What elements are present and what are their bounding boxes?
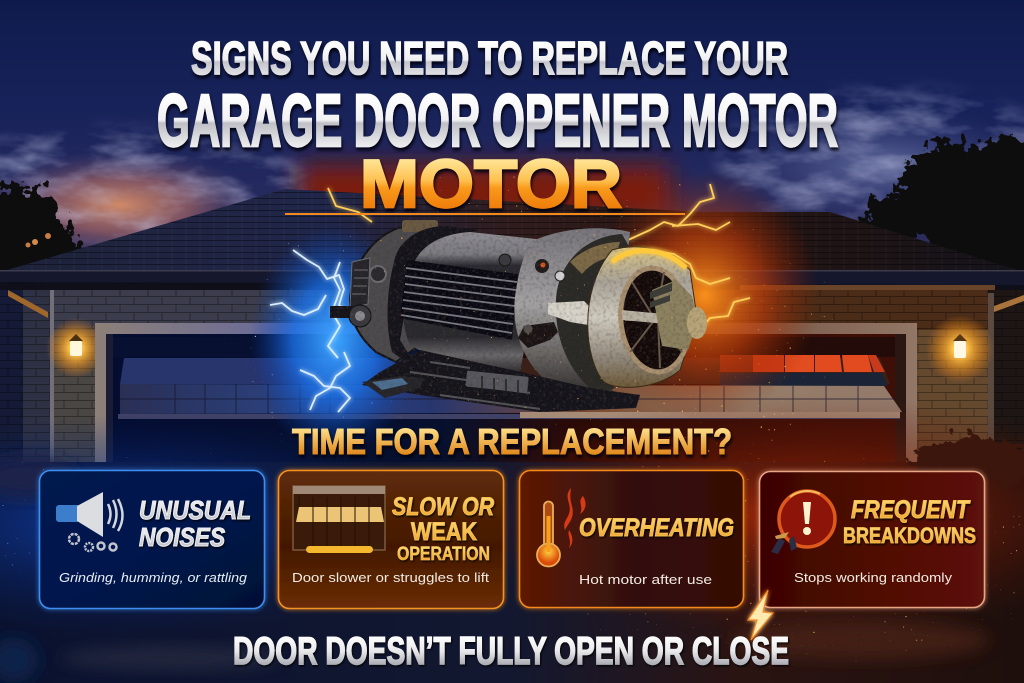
house wall with brick	[0, 290, 1024, 475]
orange lightning	[328, 184, 750, 330]
shaft and hub	[622, 310, 666, 324]
door upper panels	[120, 355, 890, 386]
orange energy glow	[590, 170, 820, 420]
card heading	[843, 496, 976, 548]
garage door	[95, 323, 917, 475]
icon: garage door	[293, 486, 385, 553]
card heading: NOISES	[139, 522, 226, 552]
card heading	[139, 495, 251, 552]
icon: warning circle with broken wires	[771, 491, 835, 554]
inner rotor opening	[616, 265, 694, 375]
card heading: OVERHEATING	[579, 514, 734, 542]
icon: lightning bolt	[748, 590, 773, 640]
icon: thermometer with heat	[537, 488, 586, 566]
question heading: TIME FOR A REPLACEMENT?	[292, 421, 732, 462]
card: frequent breakdowns	[760, 472, 984, 608]
door lower panels	[118, 384, 902, 419]
card heading: BREAKDOWNS	[843, 523, 976, 548]
collar	[514, 228, 630, 395]
card heading	[392, 493, 494, 565]
title	[157, 32, 838, 222]
card: unusual noises	[40, 470, 264, 608]
base mount	[362, 350, 640, 412]
hot edge on bell	[612, 251, 686, 268]
title line 3: MOTOR	[360, 146, 622, 222]
card heading: WEAK	[411, 518, 477, 546]
card description: Hot motor after use	[579, 572, 712, 587]
ground and shrubs	[0, 395, 1024, 683]
motor body with metal grit	[330, 220, 707, 412]
blue lightning	[270, 250, 350, 412]
trees behind the house	[0, 138, 1024, 292]
card heading: OPERATION	[397, 544, 490, 565]
bottom headline: DOOR DOESN’T FULLY OPEN OR CLOSE	[233, 630, 789, 673]
icon: speaker with gears	[56, 492, 122, 551]
dark band	[388, 226, 478, 372]
end cap	[350, 226, 440, 362]
card: overheating	[520, 470, 744, 608]
background: dusk sky with clouds	[0, 0, 1024, 250]
title line 1: SIGNS YOU NEED TO REPLACE YOUR	[191, 32, 788, 84]
front bell	[588, 247, 697, 387]
card heading: SLOW OR	[392, 493, 494, 521]
card description: Grinding, humming, or rattling	[59, 570, 248, 585]
house roof	[0, 189, 1024, 294]
card heading: UNUSUAL	[139, 495, 251, 525]
wall lamp left	[46, 318, 106, 378]
sparks texture	[2, 152, 1022, 668]
card description: Door slower or struggles to lift	[292, 570, 489, 585]
card: slow or weak operation	[278, 470, 504, 608]
barrel	[403, 232, 545, 372]
electric motor with blue and orange arcs	[250, 170, 820, 455]
card description: Stops working randomly	[794, 570, 953, 585]
orange divider	[285, 213, 685, 215]
blue energy glow	[250, 225, 420, 455]
wall lamp right	[926, 315, 994, 383]
cooling fins	[400, 260, 518, 340]
card heading: FREQUENT	[851, 496, 971, 524]
